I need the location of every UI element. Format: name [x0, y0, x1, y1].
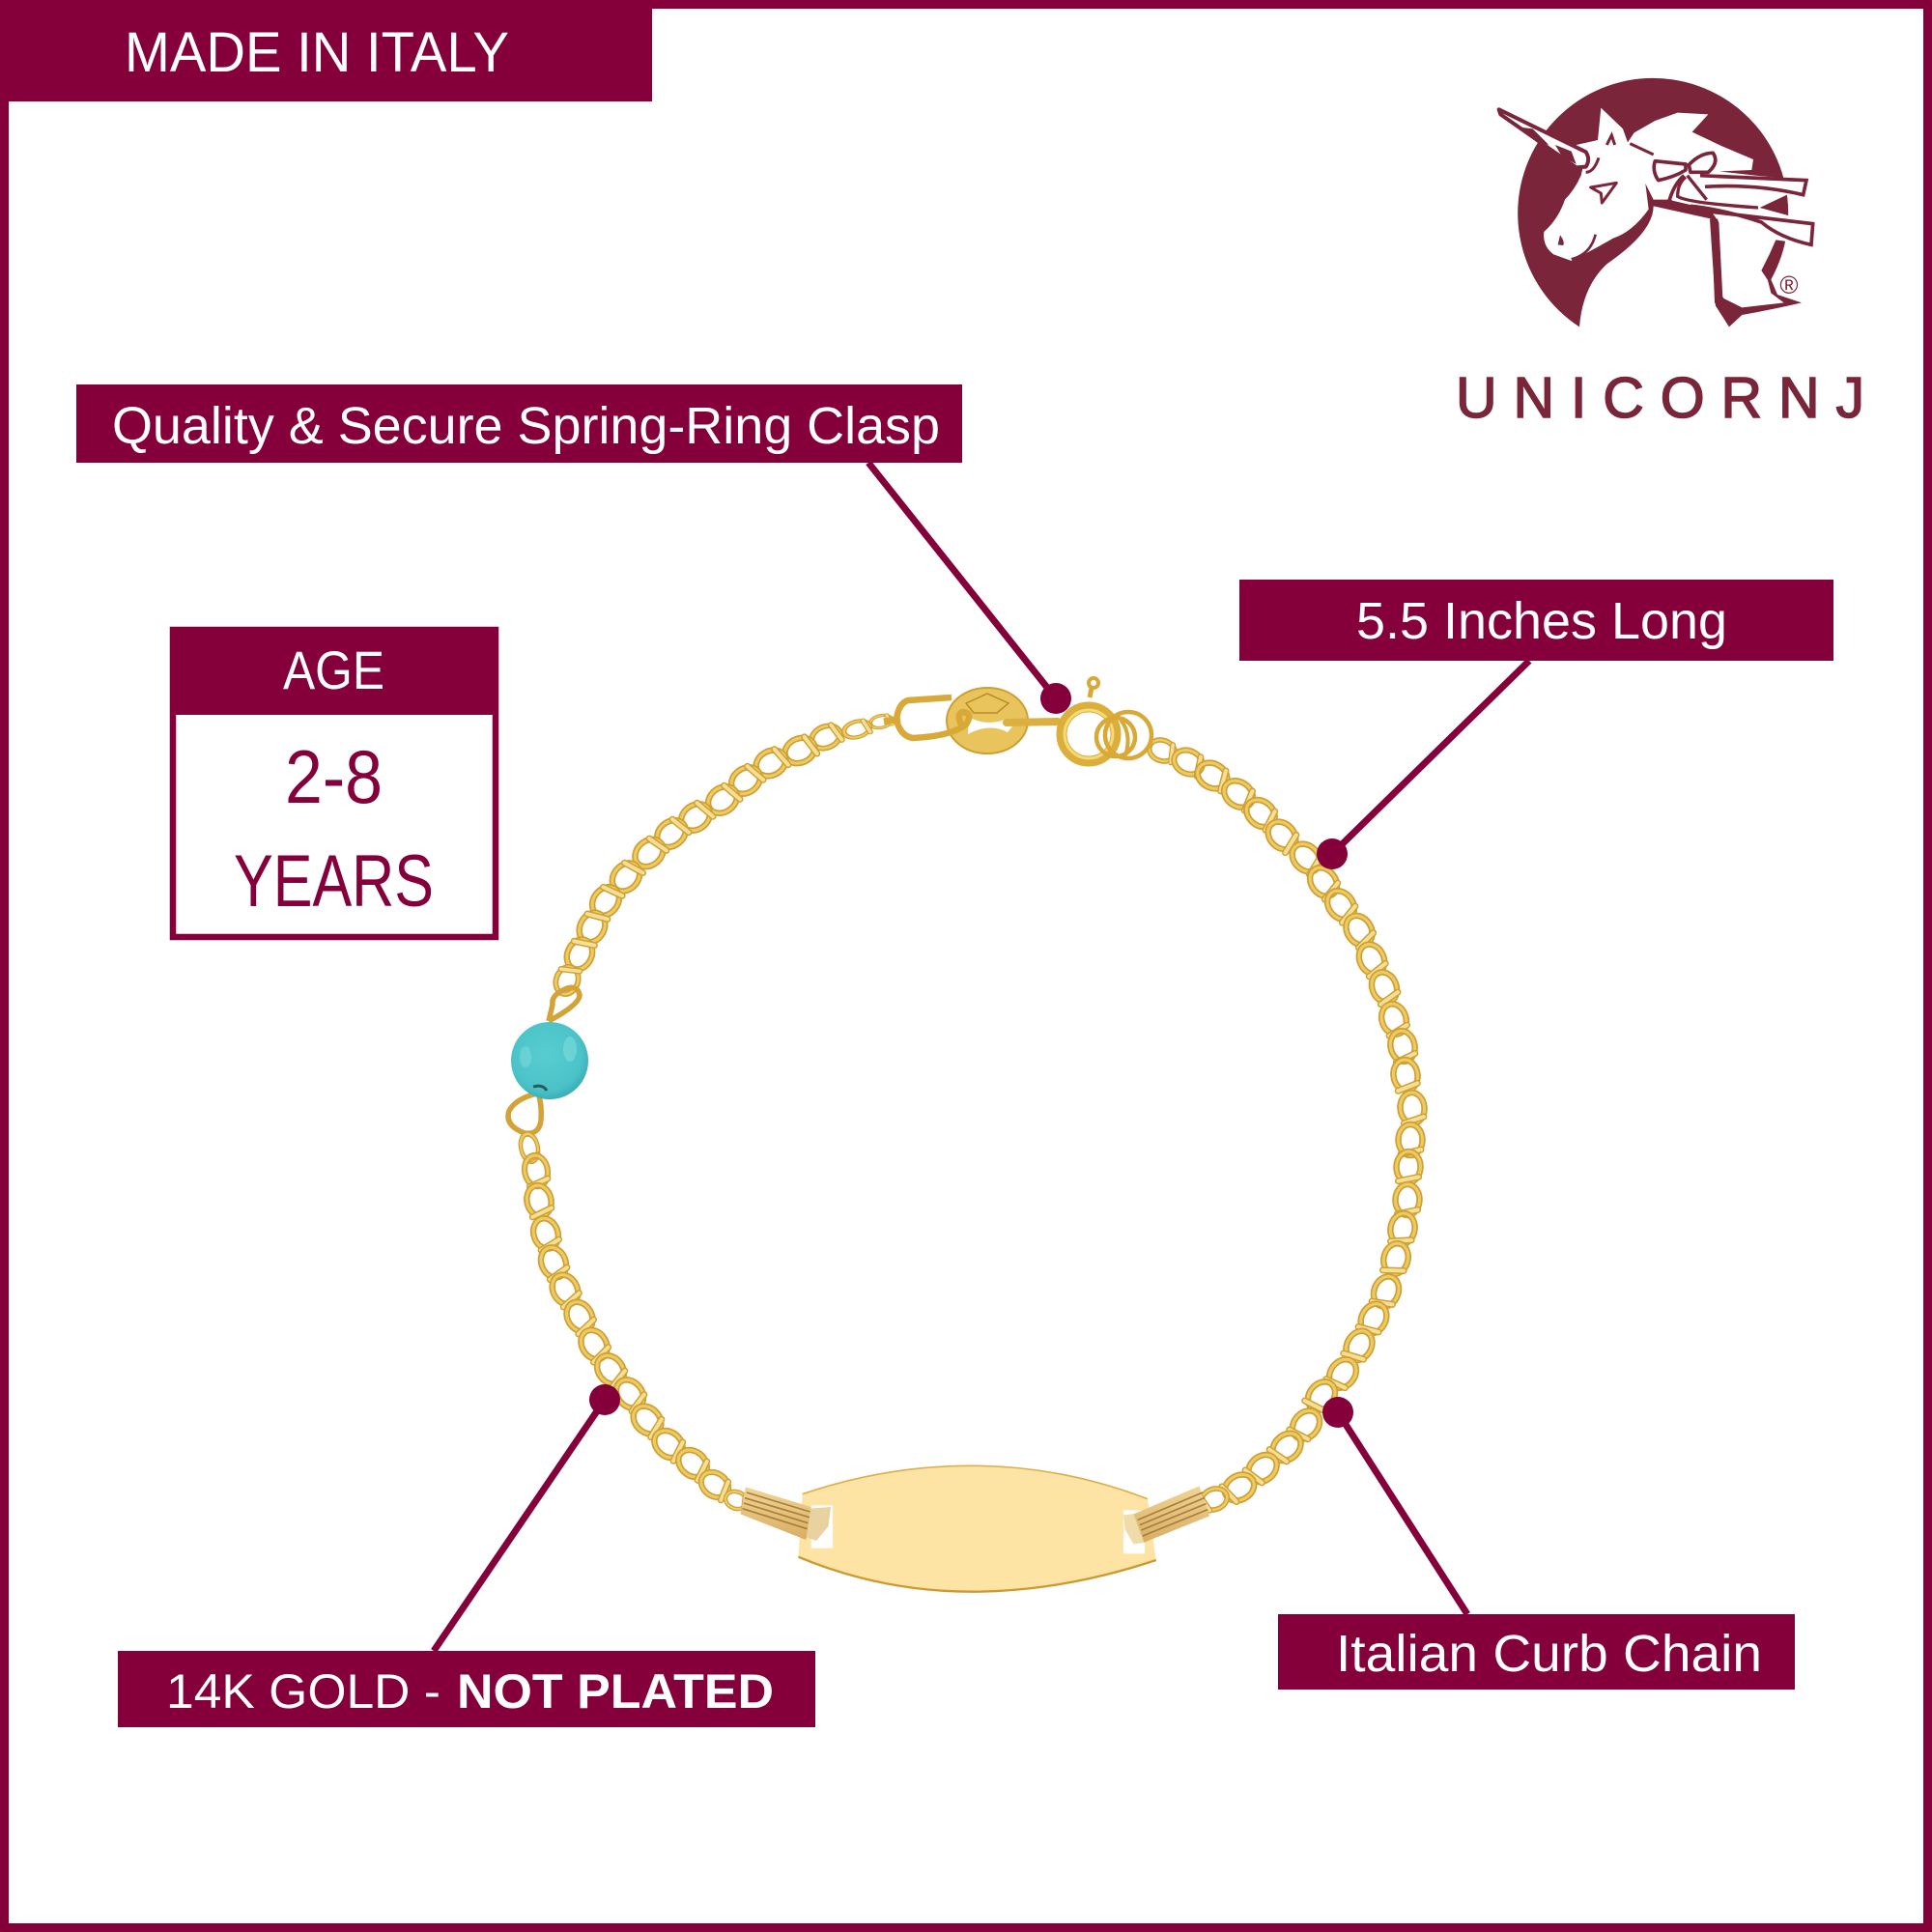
callout: curb chain	[1278, 1397, 1795, 1690]
right tube connector	[1123, 1486, 1209, 1544]
clasp: tag, oval link and spring ring	[884, 678, 1151, 761]
callout: spring-ring clasp: Quality & Secure Spring-Ring Clasp	[112, 397, 940, 455]
logo: unicorn brand mark	[1456, 78, 1864, 430]
banner: made in italy	[0, 0, 652, 101]
id plate and tube connectors	[740, 1465, 1209, 1592]
plate slots	[811, 1505, 833, 1548]
id plate	[798, 1465, 1156, 1592]
bead: turquoise	[508, 1022, 588, 1133]
callout: spring-ring clasp	[76, 384, 1071, 714]
callout: 14k gold: NOT PLATED	[457, 1664, 774, 1719]
banner: made in italy: MADE IN ITALY	[125, 21, 509, 84]
callout: length: 5.5 Inches Long	[1356, 592, 1727, 650]
panel: age: YEARS	[234, 840, 434, 923]
logo: wordmark: UNICORNJ	[1456, 366, 1864, 430]
chain: right section	[1147, 736, 1426, 1514]
panel: age: 2-8	[285, 734, 383, 819]
registered mark: ®	[1779, 270, 1799, 299]
chain: left upper section	[549, 714, 893, 1021]
callout: 14k gold	[118, 1384, 815, 1727]
chain: left lower section	[518, 1132, 750, 1512]
callout: 14k gold: 14K GOLD -	[166, 1664, 440, 1719]
left tube connector	[740, 1487, 831, 1541]
bracelet photo illustration	[508, 678, 1426, 1592]
panel: age	[170, 627, 498, 937]
panel: age: AGE	[283, 639, 384, 700]
callout: length	[1239, 580, 1833, 869]
callout: curb chain: Italian Curb Chain	[1336, 1625, 1762, 1683]
